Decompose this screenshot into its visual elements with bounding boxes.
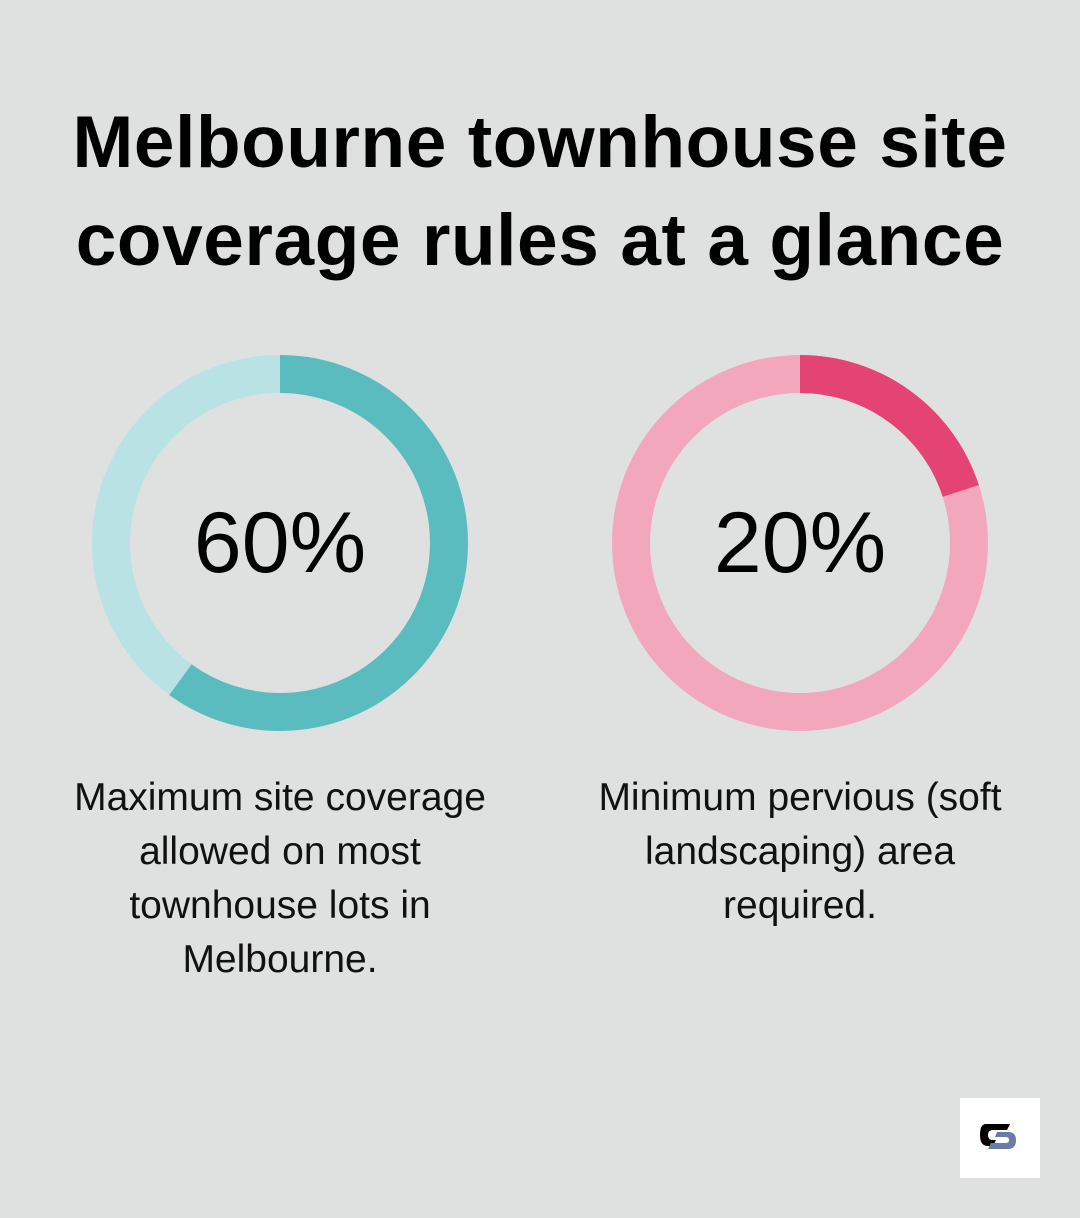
text: 60% description: allowed on most <box>139 830 421 873</box>
text: 20% description: landscaping) area <box>645 830 955 873</box>
text: 60% description: Melbourne. <box>182 938 378 981</box>
text: 20% description: required. <box>723 884 877 927</box>
title: coverage rules at a glance <box>76 200 1004 281</box>
donut: 20%: 20% <box>714 495 886 591</box>
text: 60% description: Maximum site coverage <box>74 776 486 819</box>
text: 20% description: Minimum pervious (soft <box>598 776 1002 819</box>
logo <box>960 1098 1040 1178</box>
text: 20% description <box>598 776 1002 927</box>
title <box>72 102 1008 281</box>
title: Melbourne townhouse site <box>72 102 1008 183</box>
donut: 20% <box>631 374 969 712</box>
donut: 60%: 60% <box>194 495 366 591</box>
donut: 60% <box>111 374 449 712</box>
text: 60% description: townhouse lots in <box>129 884 431 927</box>
text: 60% description <box>74 776 486 981</box>
